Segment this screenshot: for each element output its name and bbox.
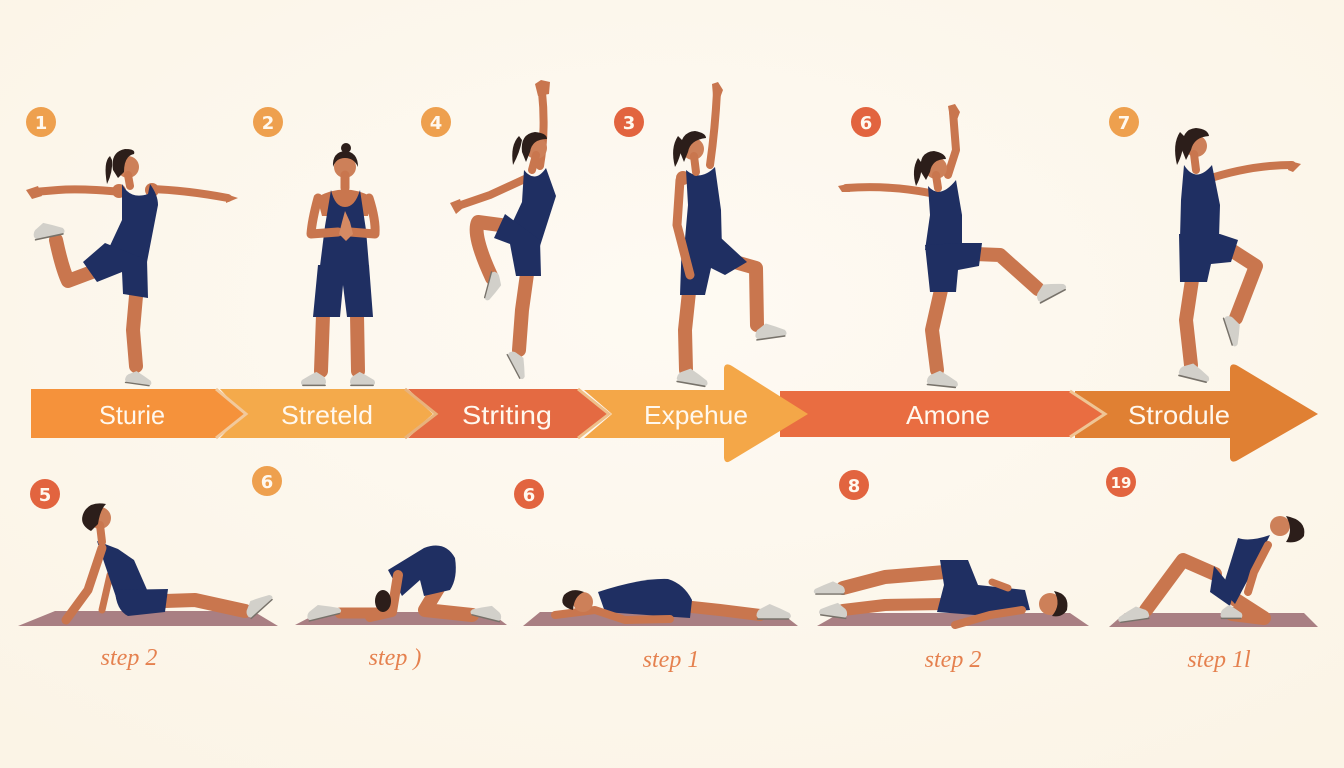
arrow segment: Streteld bbox=[220, 389, 436, 438]
step labels bbox=[101, 645, 1251, 673]
badge 6 bbox=[851, 107, 881, 137]
mat 3 bbox=[523, 612, 798, 626]
badge 3 bbox=[614, 107, 644, 137]
badge 7 bbox=[1109, 107, 1139, 137]
mat 1 bbox=[18, 611, 278, 626]
label: step ): step ) bbox=[369, 645, 421, 671]
badge 6: 6 bbox=[860, 113, 872, 134]
badge 3: 3 bbox=[623, 113, 635, 134]
badge 4: 4 bbox=[430, 113, 442, 134]
arrow segment: Expehue bbox=[584, 364, 808, 462]
label: step 2: step 2 bbox=[101, 645, 157, 671]
arrow segment: Striting: Striting bbox=[462, 400, 552, 430]
figure 2: standing with palms together bbox=[301, 143, 375, 385]
arrow segment: Expehue: Expehue bbox=[644, 400, 748, 430]
badge 5 bbox=[30, 479, 60, 509]
figure 1: standing balance with arms out bbox=[26, 149, 238, 386]
mat 2 bbox=[295, 612, 507, 625]
figure 3: raised knee and raised arm bbox=[450, 80, 556, 380]
badge 8: 8 bbox=[848, 476, 860, 497]
badge 4 bbox=[421, 107, 451, 137]
badge 19: 19 bbox=[1111, 474, 1131, 492]
mat 5 bbox=[1109, 613, 1318, 627]
label: step 1: step 1 bbox=[643, 647, 699, 673]
figure 5: leg extended, arm raised bbox=[838, 104, 1067, 388]
figure 4: raised knee side view bbox=[673, 82, 787, 387]
arrow segment: Strodule bbox=[1075, 364, 1318, 462]
badge 6 lower bbox=[252, 466, 282, 496]
figure 8: child's pose bbox=[305, 546, 504, 622]
badge 6 lower: 6 bbox=[261, 472, 273, 493]
figure 11: seated back bend bbox=[1117, 516, 1304, 623]
label: step 2 right: step 2 bbox=[925, 647, 981, 673]
badge 1 bbox=[26, 107, 56, 137]
figure 9: lying flat bbox=[555, 579, 791, 620]
figure 10: lying with leg raised bbox=[814, 560, 1067, 625]
badge 19 bbox=[1106, 467, 1136, 497]
arrow segment: Striting bbox=[408, 389, 610, 438]
arrow segment: Strodule: Strodule bbox=[1128, 400, 1230, 430]
badge 6 lower middle bbox=[514, 479, 544, 509]
badge 1: 1 bbox=[35, 113, 47, 134]
figure 6: raised knee, arm forward bbox=[1175, 128, 1301, 383]
mat 4 bbox=[817, 613, 1089, 626]
badge 8 bbox=[839, 470, 869, 500]
figure 7: seated lean back bbox=[66, 503, 274, 620]
badge 2 bbox=[253, 107, 283, 137]
badge 6 lower middle: 6 bbox=[523, 485, 535, 506]
badge 2: 2 bbox=[262, 113, 274, 134]
arrow segment: Sturie: Sturie bbox=[99, 400, 165, 430]
badge 5: 5 bbox=[39, 485, 51, 506]
badge 7: 7 bbox=[1118, 113, 1130, 134]
label: step 1l: step 1l bbox=[1187, 647, 1251, 673]
process arrow bbox=[31, 364, 1318, 462]
arrow segment: Amone bbox=[780, 391, 1105, 437]
arrow segment: Amone: Amone bbox=[906, 400, 990, 430]
arrow segment: Sturie bbox=[31, 389, 246, 438]
arrow segment: Streteld: Streteld bbox=[281, 400, 373, 430]
